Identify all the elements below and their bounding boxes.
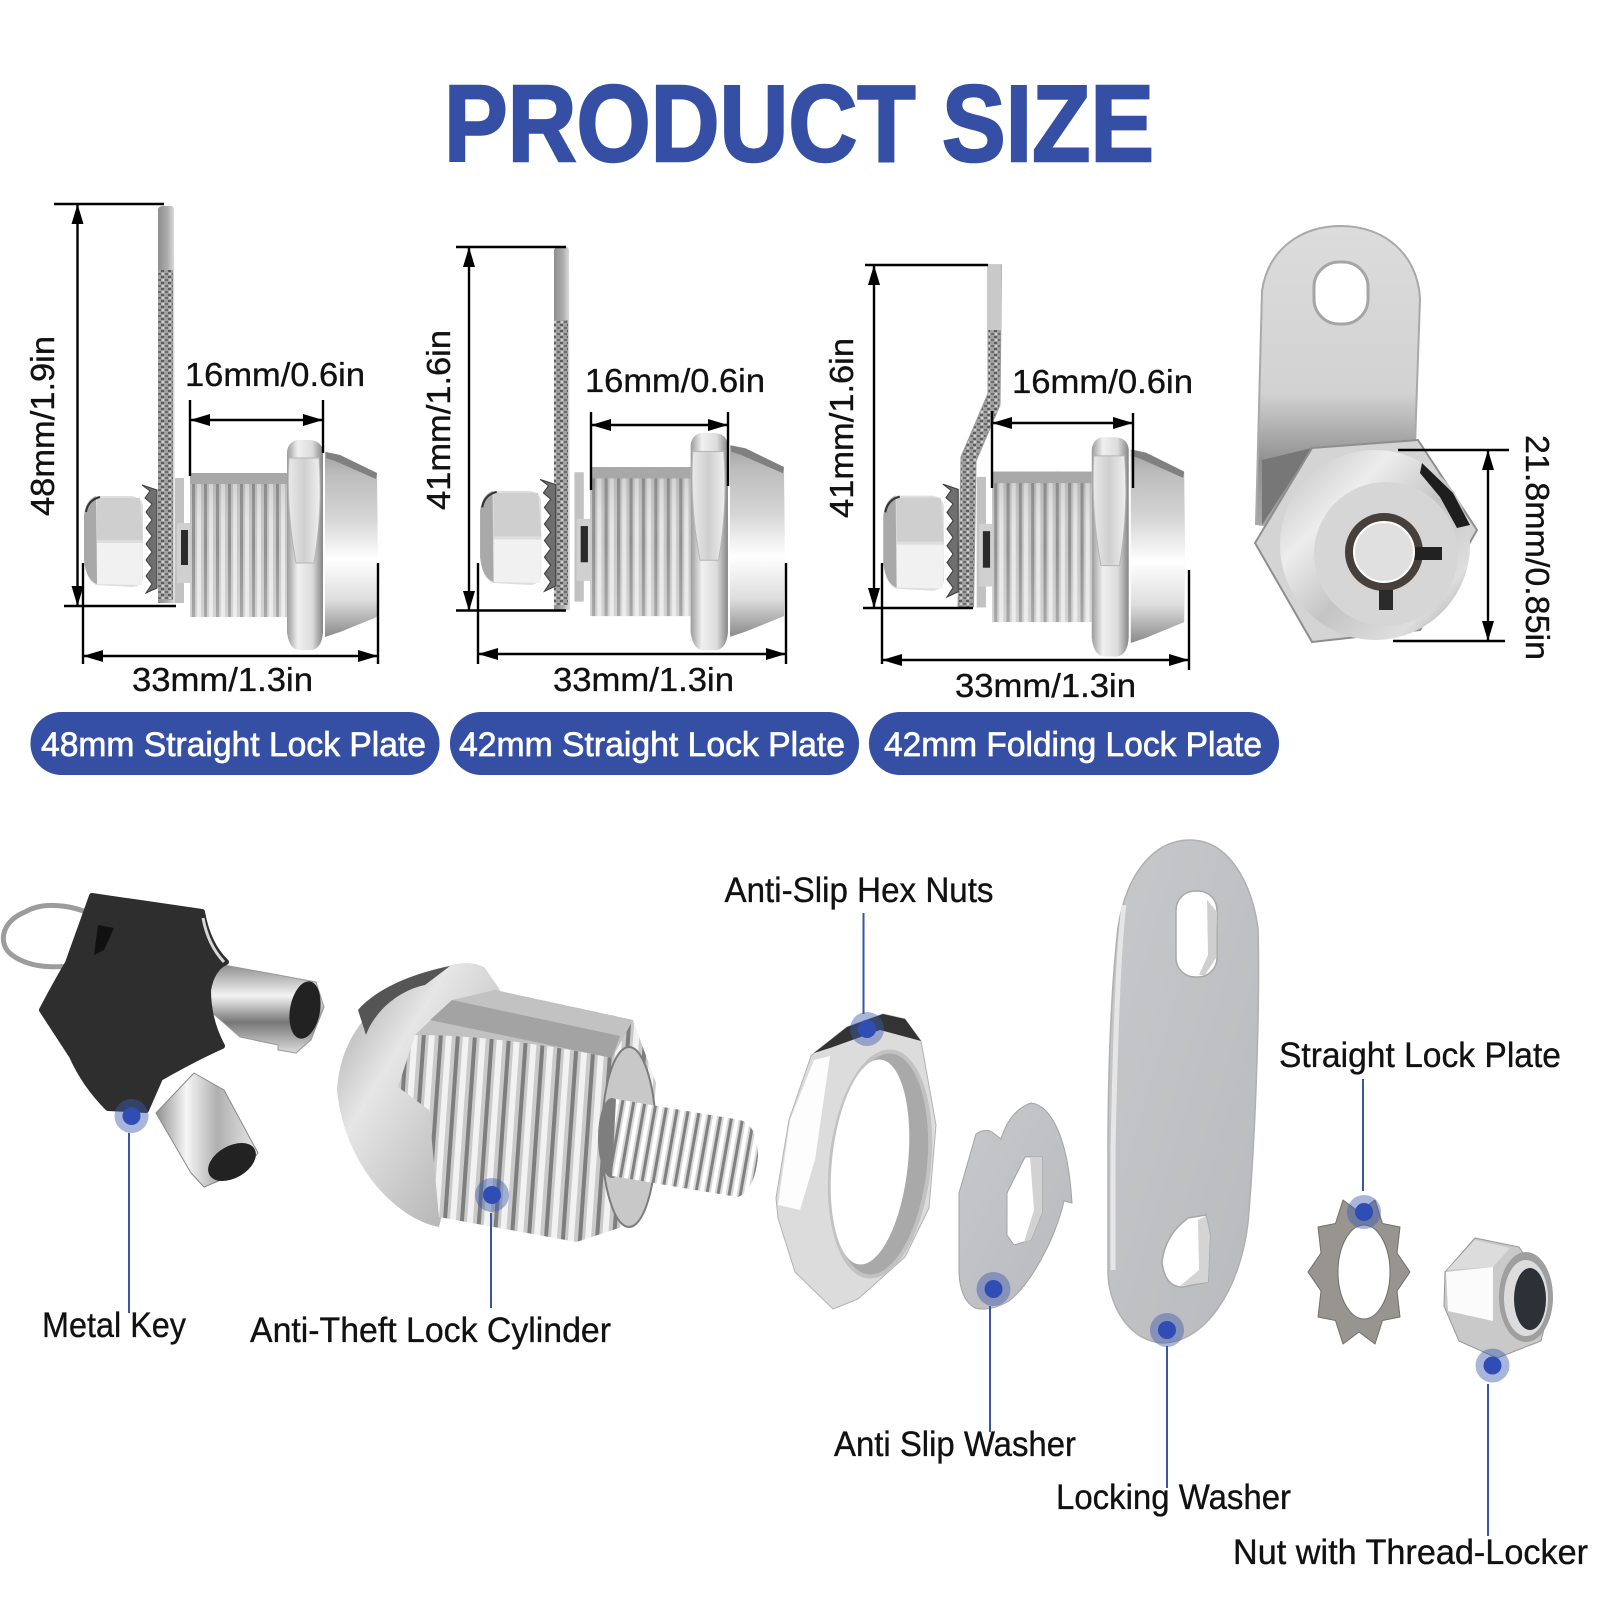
pill: 48mm straight [30, 712, 440, 775]
key face [1314, 482, 1458, 626]
key notch right [1410, 547, 1442, 560]
pill: 42mm folding [869, 712, 1279, 775]
key notch bottom [1379, 590, 1393, 610]
total length label: 33mm/1.3in [553, 661, 734, 698]
plate slot [1314, 262, 1368, 324]
back thread shadow [1262, 448, 1312, 525]
panel: anti-slip washer [959, 1103, 1072, 1309]
top slot wall [1199, 900, 1217, 975]
pill: 42mm folding: 42mm Folding Lock Plate [884, 726, 1262, 764]
lower key blade [156, 1073, 258, 1187]
panel: 42mm straight lock plate [420, 247, 786, 698]
thread length label: 16mm/0.6in [585, 362, 765, 399]
collar [1499, 1252, 1553, 1342]
callout: anti slip washer [834, 1272, 1076, 1464]
top facet [1447, 1240, 1510, 1270]
top slot [1176, 891, 1217, 977]
callout: metal key: Metal Key [42, 1306, 186, 1345]
callout: anti-slip hex nuts [724, 871, 994, 1046]
collar highlight [1504, 1260, 1548, 1336]
total length dimension [83, 563, 378, 664]
upper key blade [204, 965, 324, 1053]
key plug [1354, 522, 1414, 582]
dark top facet [814, 1014, 921, 1053]
height label: 48mm/1.9in [24, 336, 61, 516]
panel: star washer [1308, 1200, 1410, 1344]
thread length dimension [992, 411, 1133, 488]
callout: locking washer [1056, 1313, 1291, 1517]
total length label: 33mm/1.3in [132, 661, 313, 698]
dark reflection [1420, 463, 1470, 528]
end disc [602, 1047, 656, 1227]
washer body [959, 1103, 1072, 1309]
plate texture [554, 320, 568, 605]
height dimension [54, 204, 176, 606]
callout: straight lock plate: Straight Lock Plate [1279, 1036, 1561, 1075]
key ring [1345, 513, 1423, 591]
total length dimension [882, 563, 1189, 670]
lock body [480, 433, 785, 650]
height dimension [863, 265, 988, 608]
lower key hole [201, 1135, 263, 1189]
body top band dark stripe [430, 1000, 620, 1058]
callout: straight lock plate [1279, 1036, 1561, 1229]
panel: 48mm straight lock plate [24, 204, 378, 698]
nut body [776, 1014, 936, 1309]
bolt overlay [612, 1099, 758, 1197]
key hole slot [94, 925, 114, 955]
panel: lock cylinder [337, 963, 758, 1242]
plate upper light section [988, 265, 1002, 330]
nut hole [821, 1056, 919, 1268]
total length label: 33mm/1.3in [955, 667, 1136, 704]
hex flange [1255, 440, 1477, 642]
plate texture [158, 270, 173, 600]
thread length label: 16mm/0.6in [185, 356, 365, 393]
callout: anti-theft lock cylinder: Anti-Theft Lock Cylinder [250, 1311, 611, 1350]
total length dimension [478, 563, 786, 664]
lock body [84, 440, 378, 650]
callout: locking washer: Locking Washer [1056, 1478, 1291, 1517]
height label: 41mm/1.6in [420, 330, 457, 510]
panel: hex nut [776, 1014, 941, 1309]
domed front [1280, 450, 1470, 640]
thread length dimension [190, 400, 323, 476]
threaded body [398, 990, 656, 1242]
cam plate [1256, 226, 1420, 530]
plate body [1108, 840, 1259, 1343]
upper key hole [285, 979, 325, 1041]
folded lock plate [958, 265, 1002, 607]
lock plate [158, 206, 175, 603]
callout: metal key [42, 1099, 186, 1345]
bottom slot wall [1180, 1216, 1210, 1286]
threaded bolt [607, 1099, 758, 1197]
width dimension [1393, 450, 1509, 641]
panel: front view of cam lock [1255, 226, 1556, 660]
body top band [415, 990, 633, 1058]
nut white facet [778, 1056, 830, 1210]
panel: 42mm folding lock plate [823, 265, 1193, 704]
hex body [1444, 1238, 1552, 1358]
callout: nut with thread-locker [1233, 1348, 1588, 1572]
panel: metal key [3, 896, 325, 1189]
cone front [337, 963, 500, 1227]
callout: anti-theft lock cylinder [250, 1178, 611, 1350]
nut thread band [819, 1046, 941, 1282]
bottom slot [1162, 1215, 1210, 1287]
bolt collar [598, 1098, 626, 1178]
height label: 41mm/1.6in [823, 338, 860, 518]
black key head [42, 896, 226, 1110]
title: PRODUCT SIZE [444, 63, 1154, 185]
panel: long straight plate [1108, 840, 1259, 1343]
lock body [883, 437, 1185, 657]
height dimension [456, 247, 566, 610]
callout: nut with thread-locker: Nut with Thread-Locker [1233, 1533, 1588, 1572]
callout: anti slip washer: Anti Slip Washer [834, 1425, 1076, 1464]
white facet [1446, 1267, 1493, 1321]
width label: 21.8mm/0.85in [1519, 435, 1556, 660]
pill: 42mm straight: 42mm Straight Lock Plate [459, 726, 845, 764]
washer hole inner wall [1024, 1157, 1042, 1242]
key head chrome ridge [203, 918, 224, 962]
panel: nylon lock nut [1444, 1238, 1553, 1358]
cone dark rim [358, 966, 450, 1035]
plate edge highlight [1113, 905, 1124, 1270]
lock plate [554, 247, 570, 610]
callout: anti-slip hex nuts: Anti-Slip Hex Nuts [724, 871, 994, 910]
nylon insert [1514, 1268, 1546, 1330]
key ring [3, 905, 105, 967]
thread length dimension [591, 412, 728, 490]
thread length label: 16mm/0.6in [1012, 363, 1193, 400]
pill: 42mm straight [450, 712, 859, 775]
pill: 48mm straight: 48mm Straight Lock Plate [41, 726, 426, 764]
